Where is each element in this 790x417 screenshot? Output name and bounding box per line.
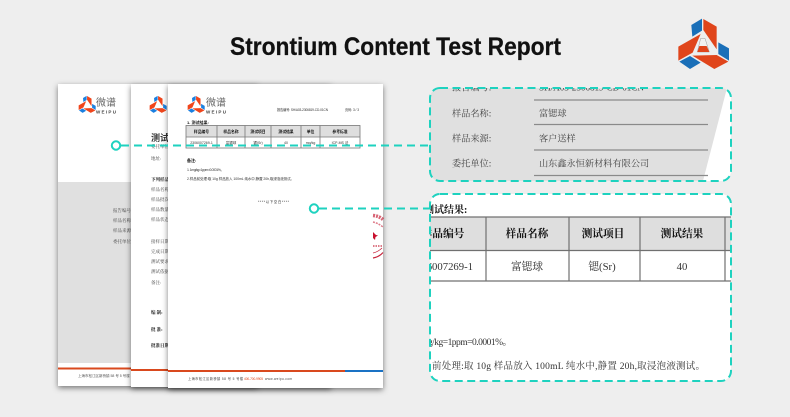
panel 1 field text: 样品名称: bbox=[452, 108, 491, 118]
page 2 fields: 完成日期: bbox=[151, 248, 170, 255]
panel 2 table header: 测试结果 bbox=[661, 227, 704, 240]
page 3 logo bbox=[188, 96, 205, 113]
page 2 footer rule bbox=[131, 369, 331, 371]
page 2 fields: 批 准: bbox=[151, 326, 163, 333]
page 3 notes: 2.样品前处理:取 10g 样品放入 100mL 纯水中,静置 20h,取浸泡液测试。 bbox=[187, 176, 294, 181]
page 3 report number: 报告编号: SH/A03-2306819-CD-01CN bbox=[277, 107, 329, 112]
page 3 section heading: 1. 测试结果: bbox=[187, 119, 209, 125]
panel 1 field text: 报告编号: bbox=[452, 82, 491, 92]
title: Strontium Content Test Report bbox=[230, 33, 562, 61]
page 3 table header: 测试结果 bbox=[278, 129, 294, 134]
panel 1 field text: 样品来源: bbox=[452, 132, 491, 144]
page 3 notes: 备注: bbox=[187, 157, 196, 163]
page 3 report number: 页码: 3 / 3 bbox=[345, 107, 359, 112]
panel 1 dashed border bbox=[430, 88, 731, 181]
panel 2 table header: 样品编号 bbox=[422, 227, 465, 240]
page 3 report number bbox=[277, 107, 359, 112]
panel 1 field text: 富锶球 bbox=[539, 108, 567, 118]
page 3 table row: 锶(Sr) bbox=[253, 140, 263, 145]
panel 2 table row: 2306007269-1 bbox=[411, 261, 473, 273]
cover fields: 样品名称: bbox=[113, 217, 132, 224]
panel 1 field text: 山东鑫永恒新材料有限公司 bbox=[539, 158, 649, 168]
panel 1 field text: 委托单位: bbox=[452, 158, 491, 168]
panel 2 table row: 锶(Sr) bbox=[588, 260, 616, 273]
page 3 table row: 2306007269-1 bbox=[190, 141, 213, 145]
cover fields bbox=[113, 207, 132, 245]
page 3 table row bbox=[190, 140, 349, 145]
panel 2 notes: 前处理:取 10g 样品放入 100mL 纯水中,静置 20h,取浸泡液测试。 bbox=[432, 360, 705, 372]
page 3: test results bbox=[168, 84, 383, 388]
panel 1 field text: 客户送样 bbox=[539, 132, 576, 144]
panel: sample information callout bbox=[430, 82, 731, 181]
page 2 fields: 委托单位: bbox=[151, 143, 170, 150]
page 3 table row: 40 bbox=[284, 141, 288, 145]
page 3 notes bbox=[187, 157, 294, 204]
page 2 fields bbox=[151, 143, 180, 349]
cover fields: 样品来源: bbox=[113, 227, 132, 234]
panel 1 field text: SH/A03-2306819-CD-01CN bbox=[539, 82, 644, 92]
page 2 fields: 下列样品信息: bbox=[151, 176, 180, 183]
cover fields: 委托单位: bbox=[113, 238, 132, 245]
panel 1 field text bbox=[452, 82, 649, 168]
connector: cover to sample information bbox=[112, 141, 430, 150]
panel 2 heading: 测试结果: bbox=[424, 203, 467, 216]
panel 2 dashed border bbox=[430, 194, 731, 381]
page 3 results table bbox=[186, 126, 360, 148]
cover logo bbox=[79, 96, 96, 113]
page 3 table row: 富锶球 bbox=[226, 140, 237, 145]
page 2 fields: 样品状态: bbox=[151, 216, 170, 223]
cover logo wordmark bbox=[96, 96, 116, 114]
cover fields: 报告编号: bbox=[113, 207, 132, 214]
page 3 table header: 样品名称 bbox=[223, 129, 239, 134]
cover grey block bbox=[58, 182, 258, 363]
panel: test results callout bbox=[411, 194, 740, 381]
page 2 fields: 地址: bbox=[151, 155, 161, 161]
panel 2 table header: 测试项目 bbox=[582, 227, 624, 240]
panel 2 table bbox=[411, 217, 740, 281]
page 2 fields: 样品名称: bbox=[151, 186, 170, 193]
connector: results page to test results bbox=[310, 204, 430, 213]
page 2 fields: 样品数量: bbox=[151, 206, 170, 213]
page 3 notes: ****以下空白**** bbox=[258, 199, 290, 204]
panel 2 table row: 40 bbox=[677, 261, 687, 273]
page 2 fields: 备注: bbox=[151, 279, 161, 286]
panel 1 fill bbox=[430, 82, 731, 181]
page 3 footer text: www.weipu.com bbox=[265, 377, 292, 381]
infographic canvas bbox=[54, 18, 732, 395]
panel 2 fill bbox=[411, 194, 740, 381]
cover logo wordmark: 微谱 bbox=[96, 96, 116, 109]
page 3 table row: ICP-MS 法 bbox=[332, 140, 349, 145]
page 3 table header: 样品编号 bbox=[194, 129, 209, 134]
panel 2 table header: 样品名称 bbox=[506, 227, 550, 240]
page 2 fields: 测试要求: bbox=[151, 258, 170, 265]
page 3 table header: 参考标准 bbox=[332, 129, 348, 134]
page 1: cover bbox=[58, 84, 258, 386]
page 2 fields: 编 制: bbox=[151, 309, 163, 316]
panel 2 table header bbox=[430, 228, 703, 238]
page 2: report details bbox=[131, 84, 331, 387]
cover footer text: 上海市松江区新桥镇 58 号 5 号楼 5 号楼 bbox=[78, 373, 141, 378]
panel 2 table row bbox=[430, 260, 687, 272]
page 2 fields: 批准日期: bbox=[151, 342, 171, 349]
panel 1 rules bbox=[534, 100, 708, 176]
page 3 footer rule orange bbox=[168, 370, 345, 372]
cover logo wordmark: WEIPU bbox=[96, 110, 116, 114]
page 3 notes: 1. 1mg/kg=1ppm=0.0001%。 bbox=[187, 168, 224, 172]
panel 2 notes bbox=[421, 338, 705, 372]
page 3 table header: 测试项目 bbox=[250, 129, 266, 134]
panel 2 notes: mg/kg=1ppm=0.0001%。 bbox=[421, 338, 512, 348]
page 3 logo wordmark: WEIPU bbox=[206, 110, 226, 114]
cover footer rule bbox=[58, 368, 258, 370]
page 2 logo bbox=[150, 96, 167, 113]
page 3 table row: mg/kg bbox=[306, 141, 315, 145]
red stamp bbox=[373, 216, 383, 258]
page 3 footer text: 400-700-9905 bbox=[244, 377, 263, 381]
page 2 heading: 测试报告 bbox=[151, 132, 187, 143]
page 3 logo wordmark: 微谱 bbox=[206, 96, 226, 109]
icon: company logo bbox=[678, 19, 729, 69]
page 2 fields: 样品批次: bbox=[151, 196, 170, 203]
page 3 table header bbox=[194, 129, 348, 134]
page 3 footer text bbox=[188, 376, 292, 381]
panel 2 table row: 富锶球 bbox=[511, 260, 543, 273]
page 2 fields: 测试依据: bbox=[151, 268, 170, 275]
page 2 fields: 接样日期: bbox=[151, 238, 170, 245]
page 3 footer rule blue bbox=[345, 370, 383, 372]
page 3 logo wordmark bbox=[206, 96, 226, 114]
page 3 footer text: 上海市松江区新桥镇 58 号 5 号楼 bbox=[188, 376, 244, 381]
page 3 table header: 单位 bbox=[307, 129, 314, 134]
